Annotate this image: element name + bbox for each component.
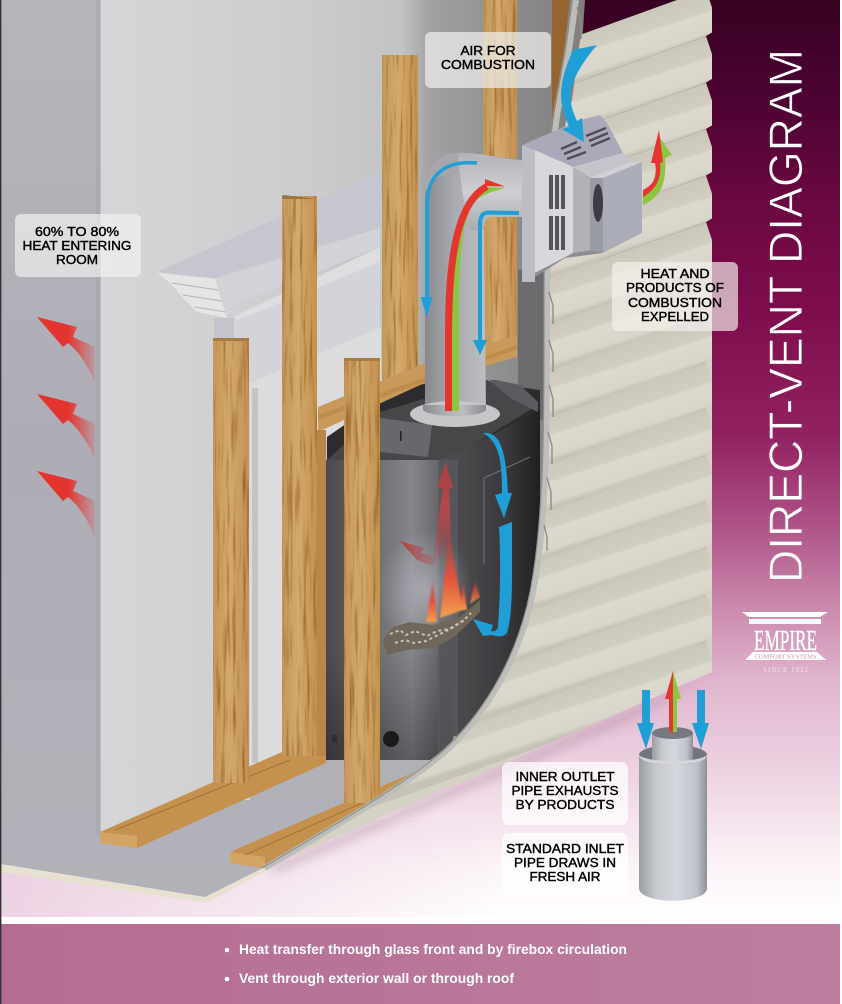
label: heat and products expelled: EXPELLED	[641, 310, 709, 324]
firebox heat arrows red	[400, 462, 453, 566]
pipe cross-section arrows	[637, 671, 709, 749]
label: standard inlet pipe: STANDARD INLET	[506, 842, 624, 856]
heat arrows entering room	[37, 317, 95, 537]
label: standard inlet pipe: FRESH AIR	[530, 870, 600, 884]
vent pipe elbow	[425, 153, 522, 412]
label: inner outlet pipe: BY PRODUCTS	[516, 798, 614, 812]
label: standard inlet pipe: PIPE DRAWS IN	[514, 856, 616, 870]
logo: Empire Comfort Systems	[742, 612, 828, 674]
siding shadow	[265, 674, 712, 872]
exhaust arrows	[643, 130, 672, 205]
pipe flow arrow: blue right	[473, 212, 519, 355]
firebox arrows blue	[473, 433, 512, 636]
title: DIRECT-VENT DIAGRAM	[759, 49, 812, 583]
vinyl siding wall	[288, 0, 712, 858]
air intake arrow	[561, 45, 597, 142]
label: air for combustion	[425, 32, 551, 88]
label: heat entering room: HEAT ENTERING	[22, 239, 132, 253]
label: heat and products expelled: PRODUCTS OF	[626, 281, 724, 295]
label: heat entering room	[15, 214, 141, 277]
bottom band with bullets	[0, 924, 842, 1004]
label: air for combustion: AIR FOR	[460, 44, 516, 58]
wood header and rear studs	[318, 0, 517, 432]
label: heat and products expelled: COMBUSTION	[628, 296, 722, 310]
studs and sill plates	[100, 195, 444, 868]
label: heat and products expelled	[612, 262, 738, 331]
label: air for combustion: COMBUSTION	[441, 58, 535, 72]
pipe flow arrows: red and green exhaust	[448, 179, 505, 411]
label: standard inlet pipe	[502, 833, 628, 895]
label: heat entering room: 60% TO 80%	[35, 225, 119, 239]
label: inner outlet pipe: INNER OUTLET	[516, 770, 615, 784]
pipe flange	[410, 401, 500, 427]
firebox	[326, 373, 548, 780]
label: heat and products expelled: HEAT AND	[640, 267, 710, 281]
pipe flow arrow: blue left	[421, 163, 477, 317]
pipe cross-section illustration	[639, 727, 707, 901]
bottom band with bullets: Heat transfer through glass front and by firebox circulation	[239, 942, 627, 957]
mantel and wall panels	[157, 172, 381, 800]
label: heat entering room: ROOM	[56, 253, 98, 267]
logo: Empire Comfort Systems: COMFORT SYSTEMS	[754, 654, 816, 660]
label: inner outlet pipe: PIPE EXHAUSTS	[512, 784, 618, 798]
label: inner outlet pipe	[502, 762, 628, 825]
vent cap	[522, 115, 642, 282]
siding cut edge flange	[262, 0, 581, 868]
pipe lower collar	[423, 405, 486, 416]
bottom band with bullets: Vent through exterior wall or through roof	[239, 971, 515, 986]
logo: Empire Comfort Systems: SINCE 1932	[763, 666, 808, 674]
